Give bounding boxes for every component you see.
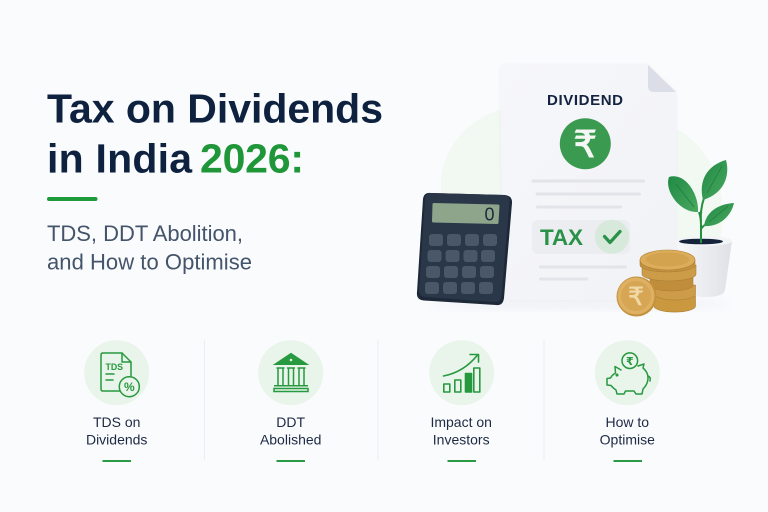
label: DDT [276,414,306,430]
background blobs [441,105,723,307]
coin stack [640,250,696,312]
leaves [668,176,698,212]
pot [676,241,732,297]
plant [668,160,734,297]
subtitle: and How to Optimise [47,250,252,274]
tax status [532,220,630,254]
label: Abolished [260,432,321,448]
front rupee coin: ₹ [628,283,644,311]
underline [448,460,476,462]
title: Tax on Dividends [47,86,383,132]
panel: How to Optimise [595,340,660,462]
label: Impact on [430,414,492,430]
label: Dividends [86,432,147,448]
calculator keys [425,234,497,294]
panel: TDS on Dividends [84,340,149,462]
icon: piggy bank with rupee coin: ₹ [626,356,634,368]
icon: TDS document with percent: TDS [106,362,123,372]
document heading: DIVIDEND [547,92,623,109]
underline [614,460,642,462]
calculator [417,193,512,305]
title [47,86,383,182]
subtitle [47,221,252,274]
label: TDS on [93,414,140,430]
calculator display: 0 [484,204,495,224]
underline [276,460,305,462]
illustration: dividend document, calculator, coins and plant [417,65,734,316]
subtitle: TDS, DDT Abolition, [47,221,243,246]
label: Investors [433,432,490,448]
icon: bank building [273,353,309,392]
leaf veins [676,166,728,222]
icon: TDS document with percent [101,353,139,397]
underline [102,460,131,462]
document [500,65,676,300]
icon: rising bar chart with arrow [444,354,480,392]
panel: Impact on Investors [429,340,494,462]
title: in India [47,136,193,182]
ground shadow [430,299,730,309]
panel: DDT Abolished [258,340,323,462]
rupee badge [560,118,611,169]
label: How to [606,414,649,430]
stem [699,198,705,243]
front rupee coin [616,276,656,316]
rupee badge: ₹ [574,124,597,165]
title accent rule [47,197,98,201]
icon: TDS document with percent: % [124,380,135,394]
title: 2026: [200,136,304,182]
column dividers [204,340,544,460]
tax status: TAX [540,225,583,250]
label: Optimise [600,432,655,448]
document fold [648,65,676,92]
document text lines [532,180,645,280]
